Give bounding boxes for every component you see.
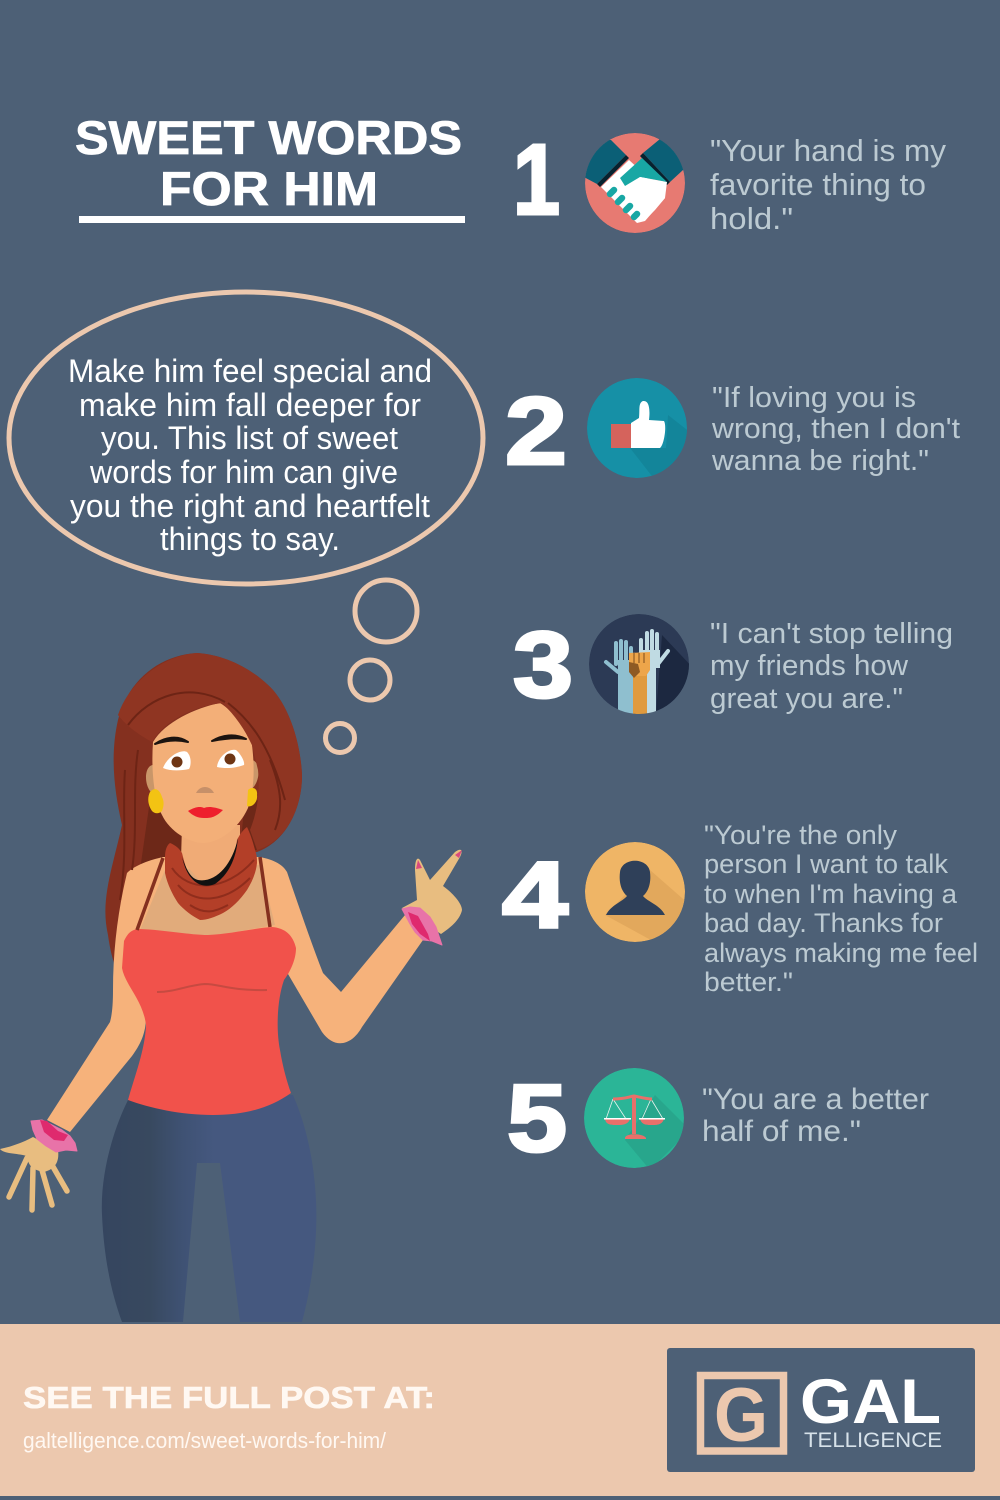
back hair [105, 653, 302, 970]
chest shading [140, 865, 275, 937]
intro text: you. This list of sweet [101, 420, 398, 456]
item 1 [517, 133, 946, 233]
quote 4: always making me feel [704, 938, 978, 968]
intro text: you the right and heartfelt [70, 488, 430, 524]
logo: TELLIGENCE [804, 1429, 942, 1452]
quote 4: bad day. Thanks for [704, 908, 943, 938]
neck [181, 825, 240, 888]
straps [137, 857, 270, 930]
number 4: 4 [502, 842, 568, 947]
title: SWEET WORDS [75, 111, 462, 164]
fist [629, 652, 650, 716]
logo: GAL [800, 1367, 941, 1437]
logo: G [714, 1373, 768, 1458]
left scrunchie [31, 1120, 77, 1152]
icon: thumbs up [587, 378, 687, 478]
woman illustration [0, 653, 462, 1322]
intro text: make him fall deeper for [79, 387, 421, 423]
quote 1 [710, 133, 947, 236]
hair shadow behind neck [140, 800, 258, 870]
item 2 [505, 378, 960, 485]
quote 3: my friends how [710, 650, 909, 682]
intro text [68, 353, 432, 557]
icon: scales [584, 1068, 690, 1170]
quote 3 [710, 618, 953, 715]
quote 4: better." [704, 967, 793, 997]
quote 4 [704, 820, 978, 997]
item 3 [513, 612, 953, 717]
number 3: 3 [513, 612, 573, 717]
chest and right arm [125, 857, 423, 1043]
ears [146, 760, 259, 795]
quote 2 [711, 382, 960, 477]
top fold lines [157, 984, 267, 992]
intro text: words for him can give [89, 454, 398, 490]
hair strands [120, 692, 285, 900]
icon: handshake [580, 133, 690, 233]
nose [196, 787, 214, 793]
quote 2: wrong, then I don't [711, 413, 960, 445]
icon: raised hands [589, 614, 695, 716]
footer url: galtelligence.com/sweet-words-for-him/ [23, 1428, 387, 1453]
eyes [163, 750, 244, 770]
item 5 [507, 1065, 929, 1172]
pale hand [640, 631, 668, 714]
quote 5: "You are a better [702, 1083, 929, 1116]
footer heading: SEE THE FULL POST AT: [23, 1380, 435, 1415]
intro text: Make him feel special and [68, 353, 432, 389]
eyebrows [155, 735, 246, 744]
quote 4: "You're the only [704, 820, 898, 850]
quote 1: favorite thing to [710, 167, 926, 202]
title [75, 111, 465, 223]
quote 4: to when I'm having a [704, 879, 958, 909]
quote 1: hold." [710, 201, 793, 236]
quote 1: "Your hand is my [710, 133, 947, 168]
necklace [182, 838, 238, 886]
lips [188, 807, 223, 818]
number 5: 5 [507, 1065, 567, 1172]
front hair [118, 653, 302, 850]
quote 4: person I want to talk [704, 849, 948, 879]
left hand [0, 1137, 67, 1210]
title: FOR HIM [160, 162, 378, 215]
quote 2: "If loving you is [712, 382, 916, 414]
right hand [402, 850, 462, 934]
number 2: 2 [505, 378, 567, 485]
intro text: things to say. [160, 521, 340, 557]
item 4 [502, 820, 978, 997]
blue hand [606, 641, 634, 714]
quote 5: half of me." [702, 1115, 861, 1148]
quote 5 [702, 1083, 929, 1148]
jeans [102, 1095, 316, 1322]
thought bubble [9, 292, 483, 752]
right scrunchie [402, 907, 442, 945]
quote 3: "I can't stop telling [710, 618, 953, 650]
quote 2: wanna be right." [711, 445, 929, 477]
left arm [47, 873, 146, 1132]
red top [122, 927, 296, 1115]
earrings [148, 788, 257, 813]
number 1: 1 [513, 124, 560, 236]
logo [667, 1348, 975, 1472]
scarf [165, 827, 257, 920]
scarf folds [172, 860, 254, 911]
nails [416, 850, 462, 869]
icon: person [585, 842, 690, 945]
face [152, 703, 254, 843]
footer band [0, 1324, 1000, 1496]
quote 3: great you are." [710, 683, 903, 715]
